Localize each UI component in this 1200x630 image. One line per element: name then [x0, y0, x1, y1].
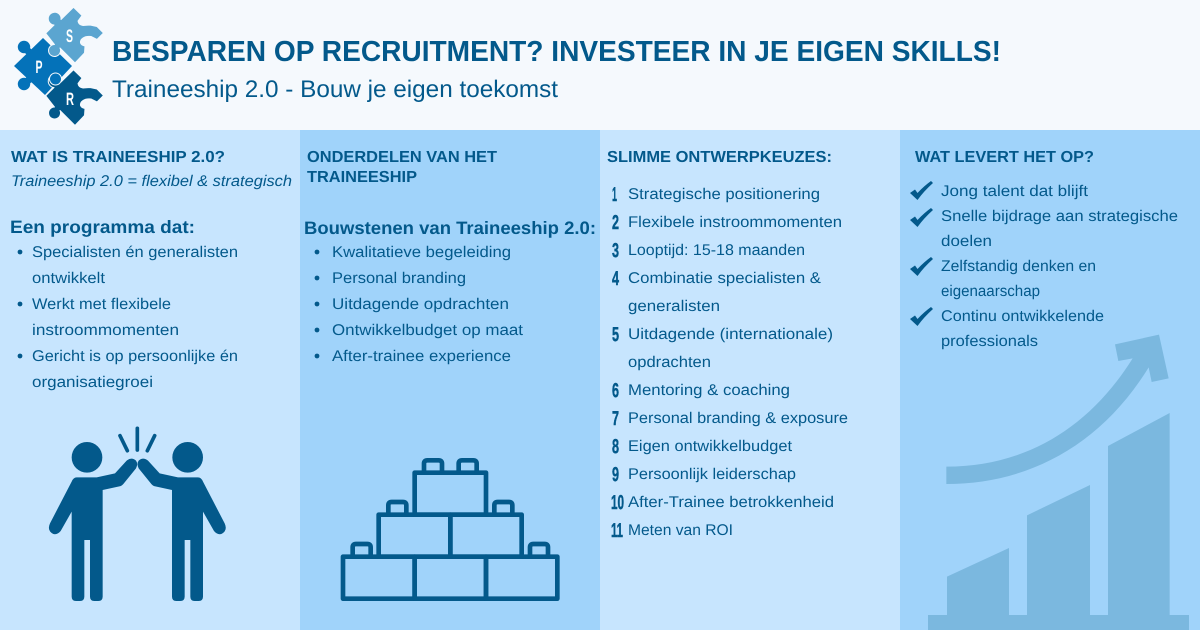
icon: two people high five	[49, 428, 226, 601]
numbered list: 10	[611, 492, 624, 514]
bullet list: programma: organisatiegroei	[32, 374, 153, 391]
numbered list: 9	[612, 464, 619, 486]
numbered list: Strategische positionering	[628, 186, 820, 203]
panel: wat levert het op	[900, 130, 1200, 630]
numbered list: 5	[612, 324, 619, 346]
check list: professionals	[941, 333, 1038, 350]
check list: Zelfstandig denken en	[941, 258, 1096, 275]
check list: Continu ontwikkelende	[941, 308, 1104, 325]
numbered list: opdrachten	[628, 354, 711, 371]
heading: slimme ontwerpkeuzes: SLIMME ONTWERPKEUZES:	[607, 149, 832, 166]
bullet list: bouwstenen: Ontwikkelbudget op maat	[332, 322, 524, 339]
heading: onderdelen: TRAINEESHIP	[307, 169, 417, 186]
bullet list: bouwstenen: Kwalitatieve begeleiding	[332, 244, 511, 261]
numbered list: Combinatie specialisten &	[628, 270, 822, 287]
subheading: een programma dat: Een programma dat:	[10, 217, 195, 237]
clap rays	[120, 428, 155, 451]
puzzle piece R: R	[66, 89, 74, 109]
bullet list: bouwstenen: After-trainee experience	[332, 348, 511, 365]
bullet list: bouwstenen	[315, 244, 524, 365]
numbered list: Looptijd: 15-18 maanden	[628, 242, 805, 259]
title: BESPAREN OP RECRUITMENT? INVESTEER IN JE EIGEN SKILLS!	[112, 36, 1001, 68]
bullet list: programma: ontwikkelt	[32, 270, 106, 287]
panel: onderdelen van het traineeship	[300, 130, 600, 630]
puzzle piece P: P	[36, 57, 42, 77]
subheading: bouwstenen: Bouwstenen van Traineeship 2.0:	[304, 218, 596, 238]
check list: doelen	[941, 233, 992, 250]
numbered list: After-Trainee betrokkenheid	[628, 494, 834, 511]
check list: eigenaarschap	[941, 283, 1040, 300]
text: definition: Traineeship 2.0 = flexibel & strategisch	[11, 173, 292, 190]
bullet list: programma: Specialisten én generalisten	[32, 244, 238, 261]
panel: slimme ontwerpkeuzes	[600, 130, 900, 630]
bullet list: programma: instroommomenten	[32, 322, 179, 339]
check list: Snelle bijdrage aan strategische	[941, 208, 1178, 225]
numbered list: Mentoring & coaching	[628, 382, 790, 399]
numbered list: Uitdagende (internationale)	[628, 326, 833, 343]
right person	[137, 442, 226, 601]
bullet list: bouwstenen: Uitdagende opdrachten	[332, 296, 509, 313]
bullet list: programma: Werkt met flexibele	[32, 296, 171, 313]
heading: wat levert het op: WAT LEVERT HET OP?	[915, 149, 1094, 166]
bullet list: programma	[18, 244, 238, 391]
numbered list: 8	[612, 436, 619, 458]
header band	[0, 0, 1200, 130]
check list: Jong talent dat blijft	[941, 183, 1089, 200]
numbered list: Eigen ontwikkelbudget	[628, 438, 793, 455]
icon: check 4	[910, 307, 933, 326]
numbered list: 4	[612, 268, 620, 290]
bullet list: programma: Gericht is op persoonlijke én	[32, 348, 238, 365]
check list	[910, 181, 1178, 350]
heading: onderdelen: ONDERDELEN VAN HET	[307, 149, 497, 166]
heading: onderdelen	[307, 149, 497, 186]
numbered list: 3	[612, 240, 619, 262]
numbered list: generalisten	[628, 298, 720, 315]
icon: check 1	[910, 181, 933, 200]
numbered list	[611, 184, 848, 542]
numbered list: Persoonlijk leiderschap	[628, 466, 796, 483]
icon: building blocks	[343, 460, 557, 599]
puzzle piece S: S	[66, 26, 73, 46]
numbered list: 2	[612, 212, 619, 234]
chart: growth bars and arrow	[928, 335, 1189, 630]
icon: check 3	[910, 257, 933, 276]
panel: wat is traineeship 2.0	[0, 130, 300, 630]
icon: check 2	[910, 208, 933, 227]
icon: puzzle logo SPR	[14, 7, 104, 125]
numbered list: 7	[612, 408, 619, 430]
numbered list: Flexibele instroommomenten	[628, 214, 842, 231]
numbered list: Meten van ROI	[628, 522, 733, 539]
heading: wat is traineeship: WAT IS TRAINEESHIP 2.0?	[11, 149, 225, 166]
numbered list: Personal branding & exposure	[628, 410, 848, 427]
numbered list: 1	[612, 184, 617, 206]
subtitle: Traineeship 2.0 - Bouw je eigen toekomst	[112, 76, 558, 103]
numbered list: 6	[612, 380, 619, 402]
numbered list: 11	[611, 520, 623, 542]
left person	[49, 442, 137, 601]
bullet list: bouwstenen: Personal branding	[332, 270, 466, 287]
